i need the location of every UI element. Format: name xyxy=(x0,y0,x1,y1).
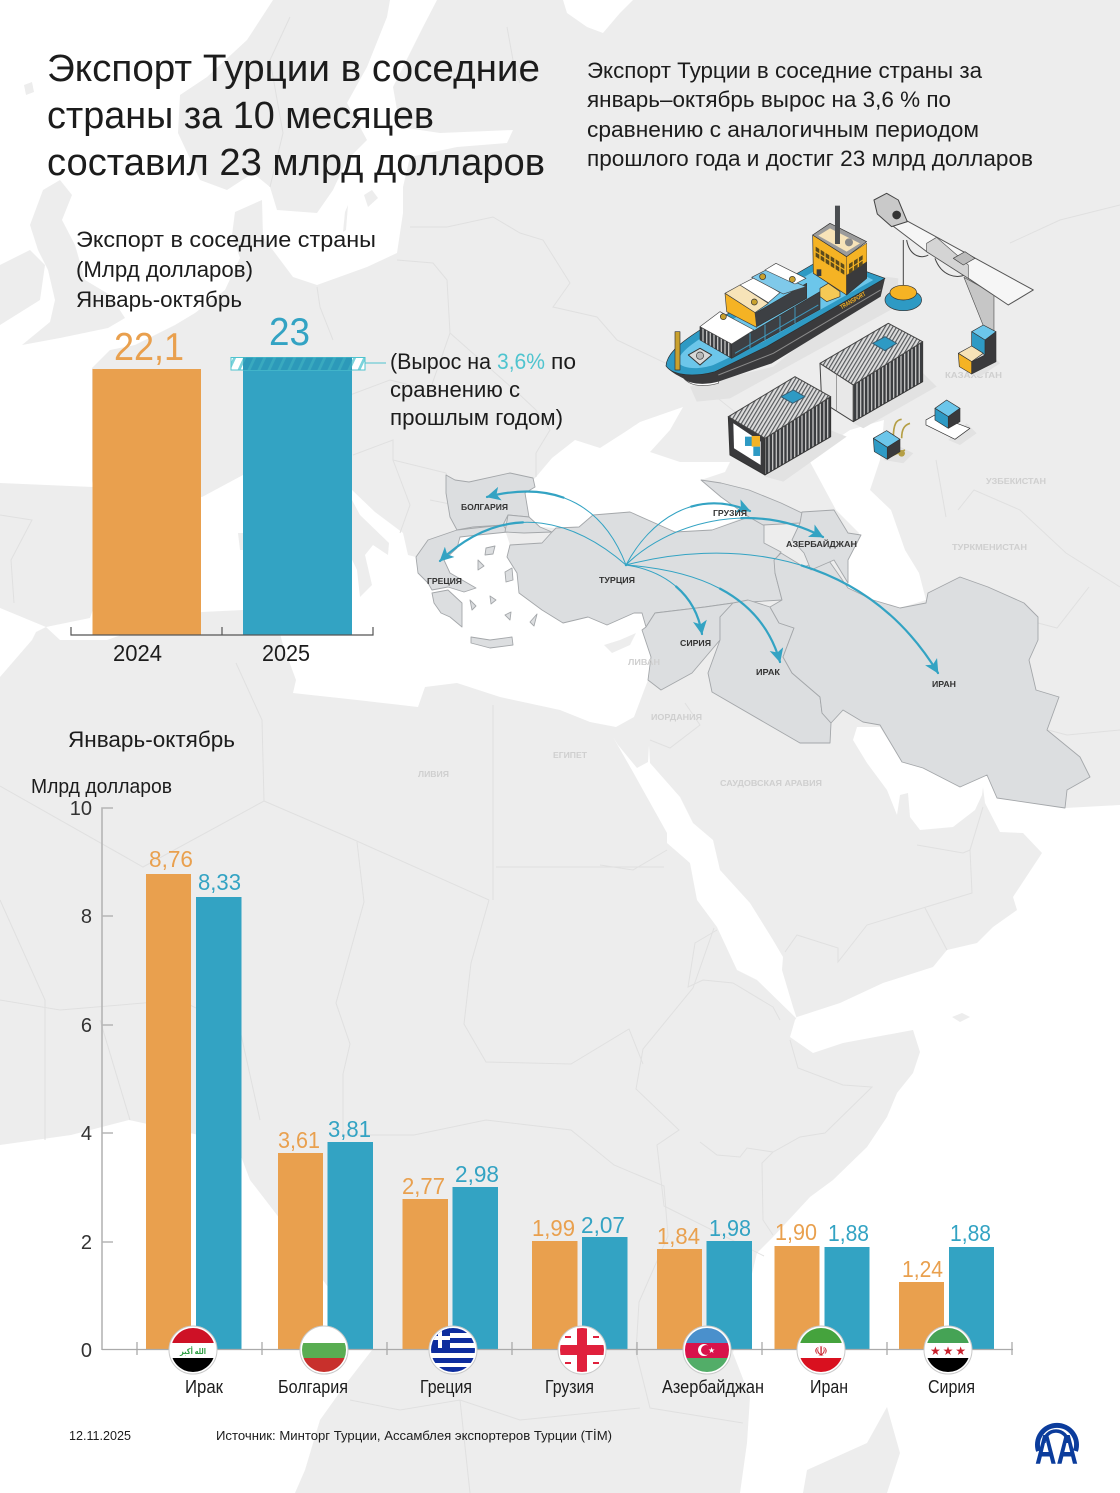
map: country name labels: ГРУЗИЯ xyxy=(713,508,747,518)
flag: Azerbaijan: ★ xyxy=(708,1346,715,1355)
back container xyxy=(820,323,923,422)
map: country name labels: ГРЕЦИЯ xyxy=(427,576,462,586)
date: 12.11.2025 xyxy=(69,1429,131,1443)
map: light country labels xyxy=(418,370,1046,788)
ground shadows xyxy=(690,277,1000,482)
bars: Iran xyxy=(774,1219,870,1350)
bars: Georgia: 1,99 xyxy=(532,1215,575,1241)
value 2024: 22,1 xyxy=(114,326,184,369)
growth hatch box xyxy=(231,358,386,370)
ship: TRANSPORT xyxy=(839,291,867,311)
illustration: cargo ship, crane, containers xyxy=(666,193,1033,482)
map: light country labels: ИОРДАНИЯ xyxy=(651,712,702,722)
map: light country labels: ТУРКМЕНИСТАН xyxy=(952,542,1027,552)
crane boxes xyxy=(958,325,996,374)
bars: Greece: 2,98 xyxy=(455,1161,499,1187)
summary chart heading: (Млрд долларов) xyxy=(76,257,253,282)
map: country name labels: АЗЕРБАЙДЖАН xyxy=(786,538,857,549)
flag: Bulgaria xyxy=(300,1326,348,1374)
flag: Iran: ☫ xyxy=(814,1343,828,1359)
growth note: сравнению с xyxy=(390,377,520,402)
title: составил 23 млрд долларов xyxy=(47,142,545,184)
bars: Azerbaijan: 1,84 xyxy=(657,1223,700,1249)
flag: Iraq: الله أكبر xyxy=(179,1346,206,1356)
Turkey shape xyxy=(505,512,782,627)
flag: Iran xyxy=(797,1326,845,1374)
title: Экспорт Турции в соседние xyxy=(47,48,540,90)
hand truck with box xyxy=(873,419,910,459)
bars: Bulgaria: 3,81 xyxy=(328,1116,371,1142)
map: country name labels: ИРАН xyxy=(932,679,956,689)
source: Источник: Минторг Турции, Ассамблея экспортеров Турции (TİM) xyxy=(216,1428,612,1443)
growth note: по xyxy=(551,349,576,374)
year labels: 2024 xyxy=(113,640,162,666)
y axis: 8 xyxy=(81,906,92,928)
front container xyxy=(728,377,831,475)
map: country name labels: СИРИЯ xyxy=(680,638,711,648)
country labels: Иран xyxy=(810,1377,848,1397)
bars: Iraq xyxy=(146,846,242,1350)
country bar chart xyxy=(31,776,1013,1397)
bar 2024 xyxy=(92,369,201,635)
flag: Georgia xyxy=(558,1326,606,1374)
flag: Syria: ★★★ xyxy=(930,1344,966,1358)
map: country name labels xyxy=(427,502,956,689)
Bulgaria shape xyxy=(446,473,535,530)
crane xyxy=(874,193,1033,334)
bridge tower xyxy=(813,235,847,295)
map: export arrows from Turkey xyxy=(440,491,938,673)
title: страны за 10 месяцев xyxy=(47,95,434,137)
bars: Syria: 1,88 xyxy=(950,1220,991,1246)
Greece shape xyxy=(416,525,537,648)
Syria shape xyxy=(642,603,733,690)
country labels: Сирия xyxy=(928,1377,975,1397)
summary chart heading xyxy=(76,227,376,312)
y axis xyxy=(70,798,113,1362)
bars: Greece xyxy=(402,1161,499,1350)
flag: Azerbaijan xyxy=(683,1326,731,1374)
year labels: 2025 xyxy=(262,640,310,666)
bars: Azerbaijan: 1,98 xyxy=(709,1215,751,1241)
country chart heading: Январь-октябрь xyxy=(68,727,235,752)
growth note: прошлым годом) xyxy=(390,405,563,430)
country labels: Болгария xyxy=(278,1377,348,1397)
bars: Syria xyxy=(899,1220,994,1350)
country labels: Ирак xyxy=(185,1377,223,1397)
map: country name labels: ТУРЦИЯ xyxy=(599,575,635,585)
bars: Georgia: 2,07 xyxy=(581,1212,625,1238)
flag: Iraq xyxy=(169,1326,217,1374)
x axis xyxy=(102,1342,1013,1355)
map: country name labels: ИРАК xyxy=(756,667,781,677)
Georgia shape xyxy=(701,480,802,525)
bars: Bulgaria: 3,61 xyxy=(278,1127,320,1153)
axis xyxy=(71,627,373,635)
country labels xyxy=(185,1377,975,1397)
map: country name labels: БОЛГАРИЯ xyxy=(461,502,508,512)
bars: Iraq: 8,33 xyxy=(198,869,241,895)
pallet with box xyxy=(926,400,970,439)
ship xyxy=(666,206,885,386)
y axis: 6 xyxy=(81,1015,92,1037)
title xyxy=(47,48,545,184)
country labels: Грузия xyxy=(545,1377,594,1397)
map: light country labels: ЛИВИЯ xyxy=(418,769,449,779)
growth note xyxy=(390,349,576,430)
Iraq shape xyxy=(708,600,831,743)
y axis title: Млрд долларов xyxy=(31,776,172,798)
bars: Azerbaijan xyxy=(657,1215,752,1350)
bars: Bulgaria xyxy=(278,1116,373,1350)
summary chart heading: Экспорт в соседние страны xyxy=(76,227,376,252)
bars: Iraq: 8,76 xyxy=(149,846,193,872)
intro text xyxy=(587,58,1033,171)
map: light country labels: КАЗАХСТАН xyxy=(945,370,1002,380)
country labels: Греция xyxy=(420,1377,472,1397)
flag: Syria xyxy=(924,1326,972,1374)
bar 2025 xyxy=(243,357,352,635)
growth note: (Вырос на xyxy=(390,349,492,374)
y axis: 10 xyxy=(70,798,92,820)
y axis: 0 xyxy=(81,1340,92,1362)
container stacks xyxy=(700,327,732,358)
Azerbaijan shape xyxy=(792,510,861,583)
y axis: 2 xyxy=(81,1232,92,1254)
bars: Syria: 1,24 xyxy=(902,1256,943,1282)
Iran shape xyxy=(770,553,1090,808)
map: highlighted countries xyxy=(416,473,1090,808)
summary chart heading: Январь-октябрь xyxy=(76,287,242,312)
map: light country labels: ЕГИПЕТ xyxy=(553,750,588,760)
intro text: январь–октябрь вырос на 3,6 % по xyxy=(587,87,951,112)
bars: Greece: 2,77 xyxy=(402,1173,445,1199)
y axis: 4 xyxy=(81,1123,92,1145)
bars: Georgia xyxy=(532,1212,628,1350)
intro text: сравнению с аналогичным периодом xyxy=(587,117,979,142)
growth note: 3,6% xyxy=(497,349,545,374)
logo: Anadolu Agency: AA xyxy=(1035,1426,1078,1473)
map: light country labels: ЛИВАН xyxy=(628,657,660,667)
bars: Iran: 1,88 xyxy=(828,1220,869,1246)
intro text: Экспорт Турции в соседние страны за xyxy=(587,58,983,83)
flag: Greece xyxy=(429,1326,477,1374)
intro text: прошлого года и достиг 23 млрд долларов xyxy=(587,146,1033,171)
map: light country labels: УЗБЕКИСТАН xyxy=(986,476,1046,486)
summary bar chart xyxy=(71,311,386,666)
map: light country labels: САУДОВСКАЯ АРАВИЯ xyxy=(720,778,822,788)
year labels xyxy=(113,640,310,666)
country labels: Азербайджан xyxy=(662,1377,764,1397)
bars: Iran: 1,90 xyxy=(775,1219,817,1245)
value 2025: 23 xyxy=(269,311,310,354)
